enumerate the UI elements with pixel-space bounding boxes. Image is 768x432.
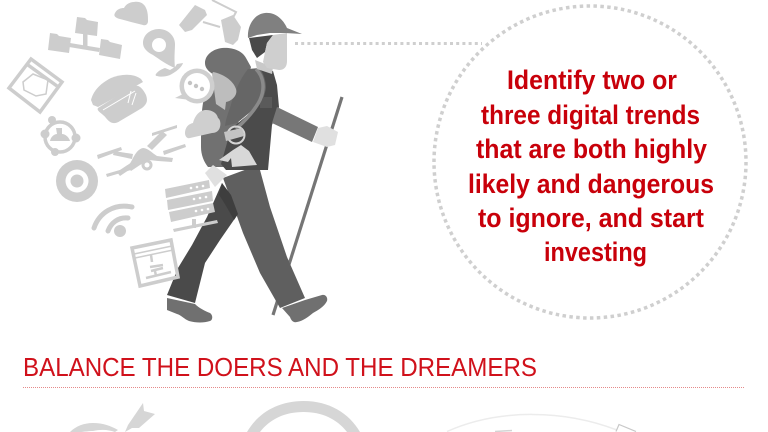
icon: hands holding tablet (179, 0, 241, 45)
face (263, 33, 287, 70)
callout text: that are both highly (476, 134, 707, 164)
bottom icon: target with arrow (70, 403, 155, 432)
icon: server stack (165, 180, 218, 232)
callout text (468, 65, 714, 267)
camera on strap (224, 126, 244, 144)
icon: round speaker (56, 160, 98, 202)
back hand (205, 165, 227, 187)
back leg (167, 183, 238, 303)
trekking pole (273, 97, 342, 315)
backpack (201, 48, 251, 167)
callout text: to ignore, and start (478, 203, 704, 233)
icon: VR headset (91, 75, 147, 123)
thigh shadow (219, 183, 238, 220)
chat bubble icon (175, 68, 236, 110)
heading divider (23, 386, 745, 388)
icon: joystick network circle (40, 116, 80, 156)
shoes (167, 295, 327, 322)
torso (221, 68, 279, 170)
chest patch (260, 97, 272, 108)
dotted connector (295, 42, 482, 45)
neck and collar (255, 60, 273, 74)
callout text: investing (544, 237, 647, 267)
hiker figure (167, 13, 342, 323)
icon: drone (97, 125, 186, 177)
cap (248, 13, 302, 38)
front hand (313, 126, 338, 147)
bottom icon: thin arc with arrow (447, 414, 636, 432)
bottom icon: ring (247, 401, 360, 432)
icon: 3D printer (132, 240, 178, 286)
icon: location pin (143, 29, 183, 77)
icon: wifi signal (94, 206, 132, 237)
cloud icon on backpack (185, 110, 220, 138)
dotted circle callout (434, 6, 746, 318)
callout text: likely and dangerous (468, 169, 714, 199)
front arm (272, 107, 318, 142)
callout text: three digital trends (481, 100, 700, 130)
icon: browser window with cube (9, 59, 62, 112)
section heading: BALANCE THE DOERS AND THE DREAMERS (23, 352, 537, 382)
callout text: Identify two or (507, 65, 677, 95)
icon: cloud top (114, 2, 148, 25)
rear sleeve (225, 68, 266, 126)
front leg (223, 168, 305, 308)
hair (249, 35, 273, 58)
light shirt shape (219, 145, 257, 167)
icon: folder network (48, 17, 122, 59)
shoulder strap (236, 69, 263, 129)
